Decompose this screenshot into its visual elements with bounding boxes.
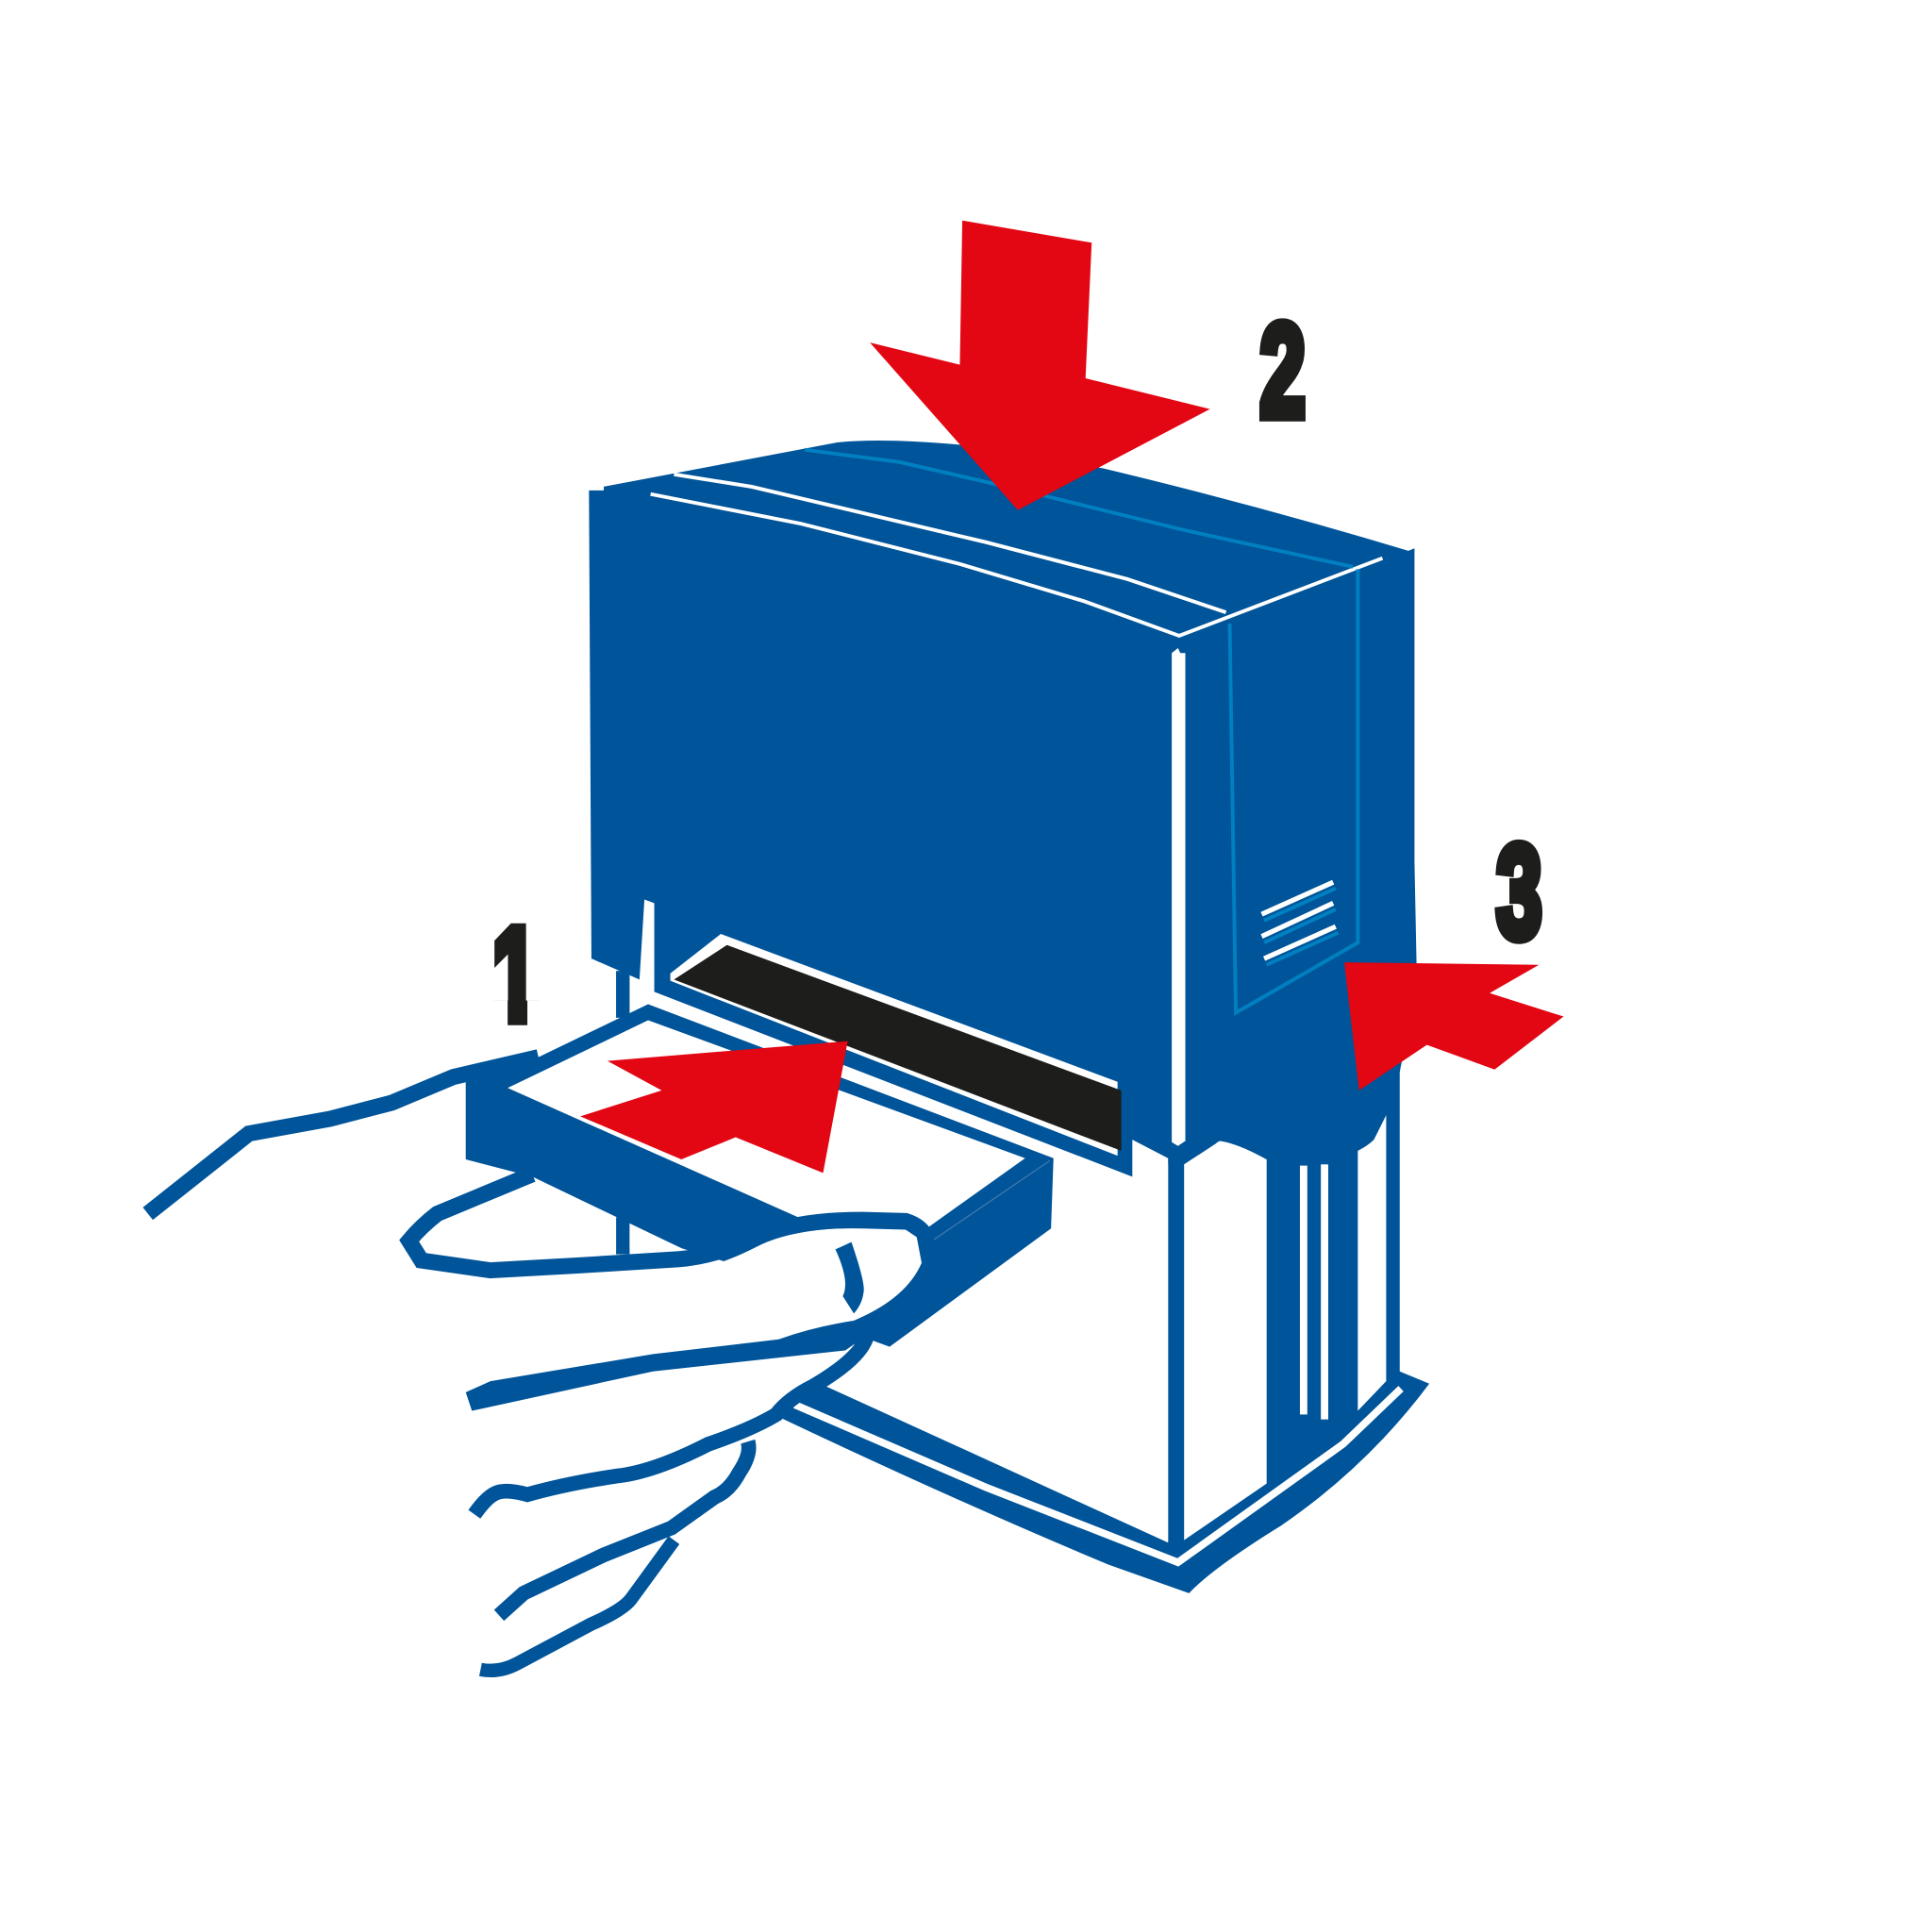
arm line xyxy=(148,1058,539,1214)
corner highlight xyxy=(1172,648,1185,1146)
index finger xyxy=(466,1321,877,1411)
small gap below tray xyxy=(629,1224,681,1249)
base groove xyxy=(794,1389,1401,1562)
number 3: 3 xyxy=(1496,818,1542,965)
base left panel xyxy=(823,1158,1168,1541)
number 2: 2 xyxy=(1260,297,1306,444)
left post xyxy=(616,971,629,1255)
arrow 1: red xyxy=(580,1041,848,1173)
finger interior xyxy=(419,1176,616,1263)
arrow 3: red xyxy=(1344,962,1563,1091)
thumb nail xyxy=(836,1242,864,1313)
finger under tray and thumb contour xyxy=(409,1174,926,1271)
number 1 xyxy=(475,901,560,1048)
tray white top xyxy=(508,1020,1025,1228)
fourth finger xyxy=(480,1541,674,1671)
side panel outline xyxy=(805,450,1357,1013)
ink slot xyxy=(671,934,1122,1156)
thumb interior xyxy=(480,1228,922,1380)
third finger xyxy=(499,1441,749,1615)
stamp base xyxy=(778,1070,1429,1593)
stamp body xyxy=(589,441,1417,1176)
tray blue body xyxy=(466,1004,1054,1347)
hand xyxy=(148,1058,926,1671)
ink pad tray xyxy=(466,1004,1054,1347)
base frame xyxy=(778,1070,1429,1593)
base white panels xyxy=(1184,1115,1386,1541)
number 1: 1 xyxy=(492,901,538,1048)
arrow 2: red xyxy=(870,221,1210,510)
body shell xyxy=(589,441,1417,1176)
second finger xyxy=(475,1328,868,1514)
top edge highlights xyxy=(651,475,1382,636)
illustration: stamp and hand xyxy=(148,441,1429,1671)
vent lines xyxy=(1261,882,1338,965)
